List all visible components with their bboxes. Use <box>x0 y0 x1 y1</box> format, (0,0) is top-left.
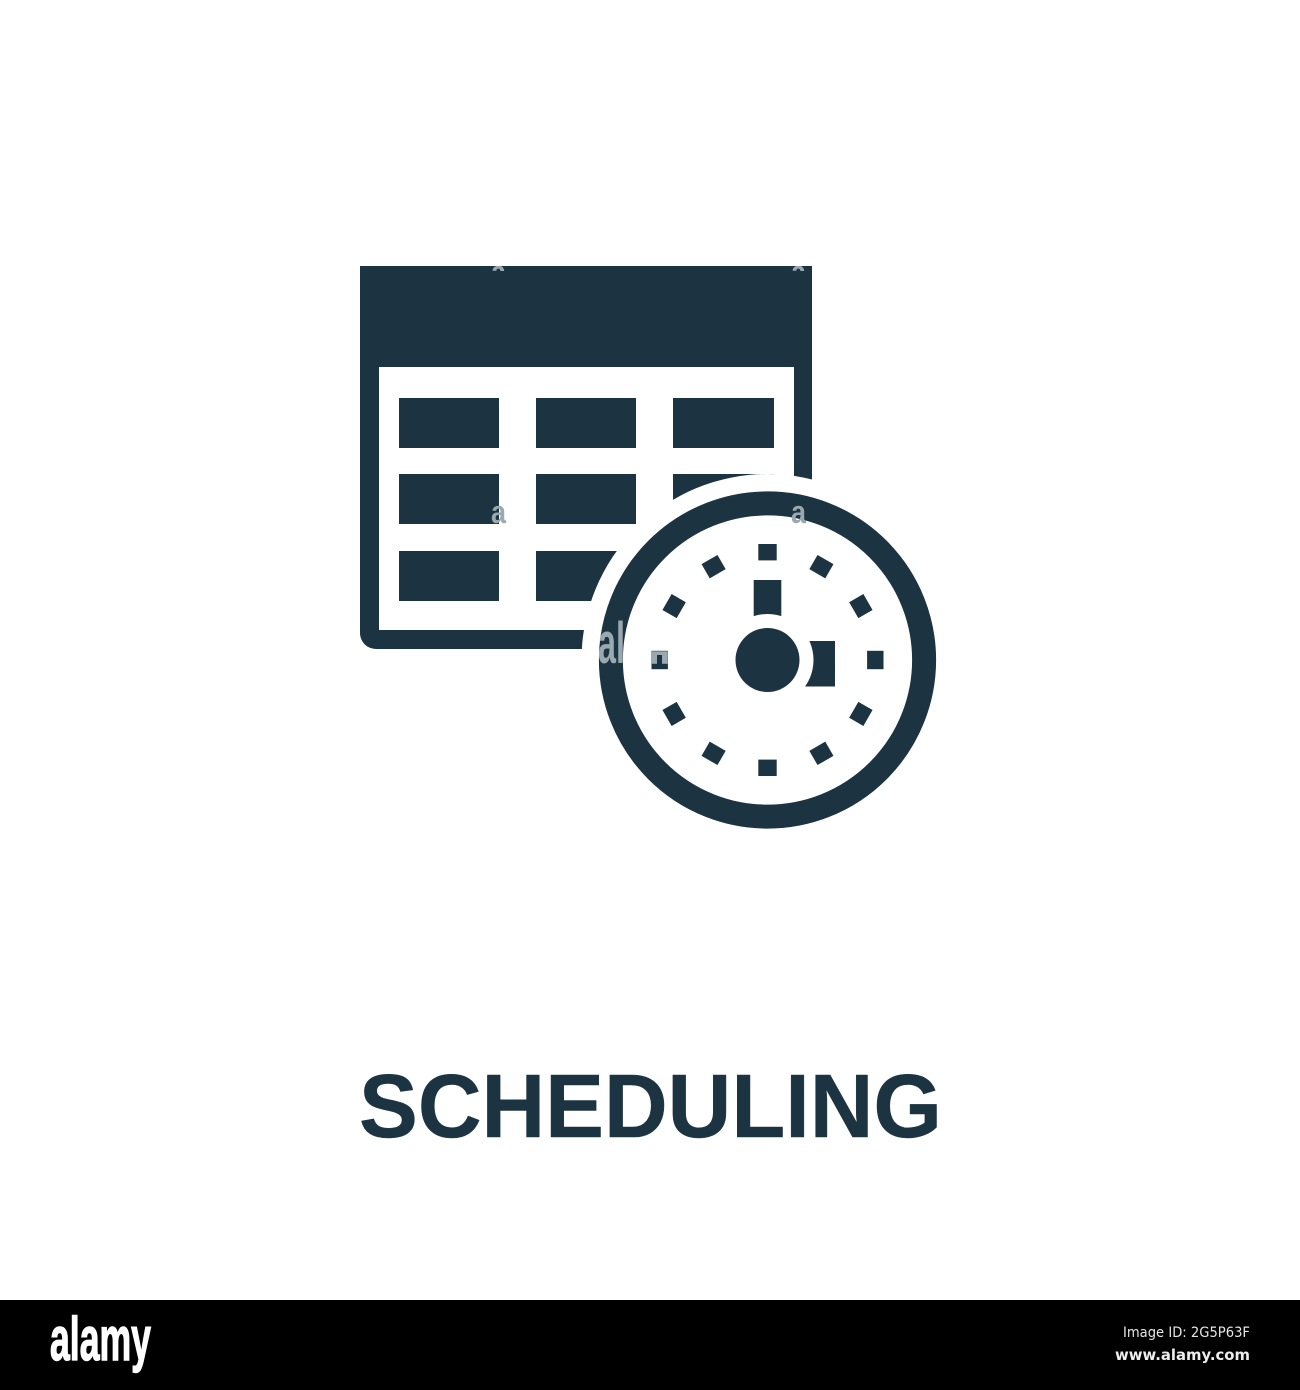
icon: clock <box>611 503 924 817</box>
title: SCHEDULING <box>359 1057 942 1157</box>
clock hour ticks <box>652 544 884 776</box>
clock centre <box>736 628 800 692</box>
calendar header and frame <box>360 266 812 649</box>
footer bar <box>0 1300 1300 1390</box>
watermark fragments: al <box>598 611 625 676</box>
watermark fragments: a <box>791 254 806 290</box>
footer logo: alamy <box>50 1305 151 1373</box>
watermark fragments: a <box>791 494 806 530</box>
watermark fragments <box>491 254 806 676</box>
watermark fragments: a <box>491 254 506 290</box>
clock ring <box>611 503 924 817</box>
image id: Image ID: 2G5P63F <box>1123 1325 1250 1341</box>
clock hands <box>754 580 835 686</box>
calendar cells <box>399 398 774 601</box>
website: www.alamy.com <box>1115 1346 1250 1364</box>
watermark fragments: a <box>491 494 506 530</box>
icon: calendar table <box>360 266 812 649</box>
